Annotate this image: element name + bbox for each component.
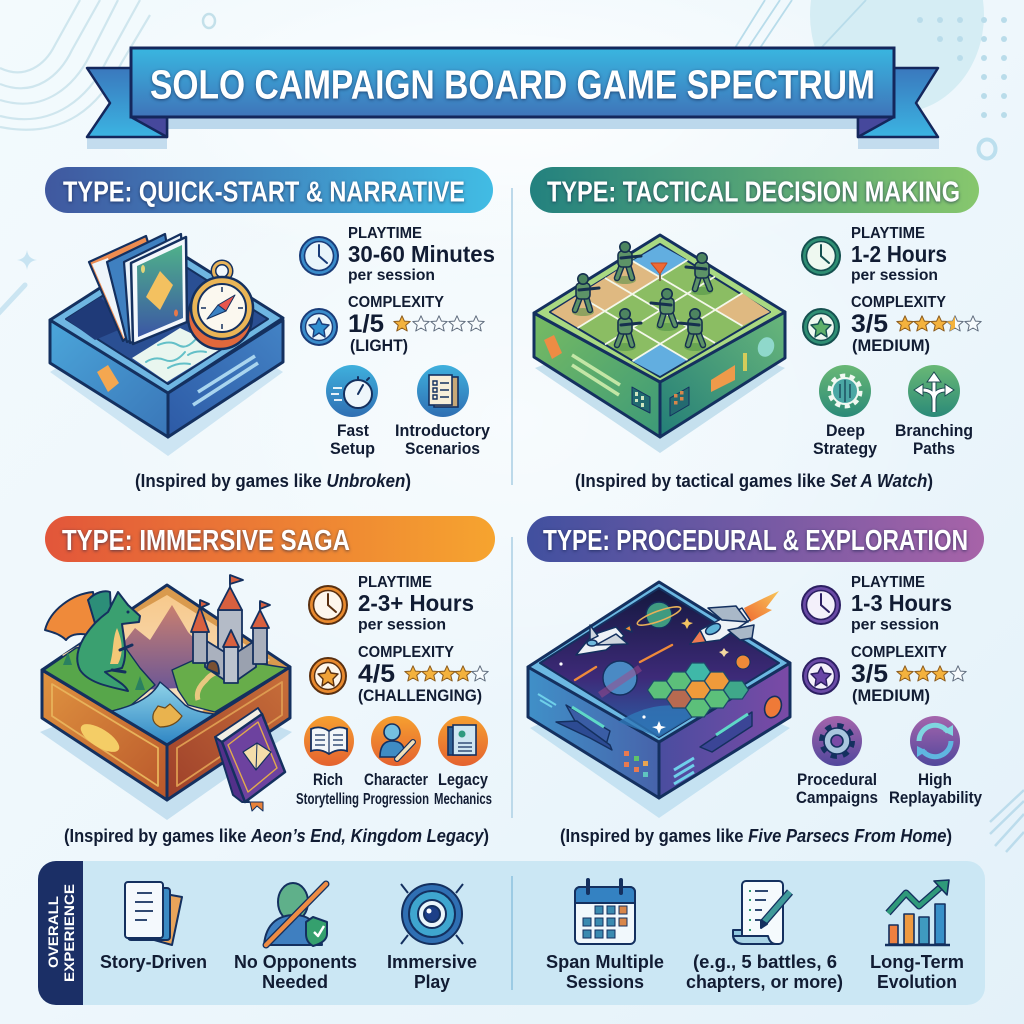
item: no opponents needed: No Opponents [234, 952, 357, 972]
icon: document stack [125, 882, 182, 945]
feature: branching paths [895, 365, 973, 458]
item: immersive play: Play [414, 972, 450, 992]
complexity [803, 644, 966, 705]
feature: character progression [363, 716, 429, 808]
icon: calendar [575, 880, 635, 944]
feature: rich storytelling: Storytelling [296, 791, 359, 808]
heading [530, 167, 979, 213]
complexity: 1/5 [348, 310, 384, 338]
heading [527, 516, 984, 562]
illustration: saga box with dragon, castle and book [40, 575, 292, 820]
icon: clock [309, 586, 347, 624]
playtime: 1-3 Hours [851, 590, 952, 616]
title banner [87, 48, 939, 149]
icon: star badge [803, 309, 839, 345]
complexity: (CHALLENGING) [358, 687, 482, 705]
feature: introductory scenarios: Introductory [395, 421, 491, 440]
heading: TYPE: QUICK-START & NARRATIVE [63, 176, 465, 208]
feature: procedural campaigns: Campaigns [796, 788, 878, 807]
item: immersive play [387, 884, 477, 992]
complexity: COMPLEXITY [358, 644, 454, 661]
icon: star badge [803, 658, 839, 694]
complexity: 3/5 [851, 310, 888, 338]
icon: clock [802, 586, 840, 624]
feature: procedural campaigns [796, 716, 878, 807]
playtime: per session [851, 267, 938, 284]
complexity: (LIGHT) [350, 337, 408, 355]
icon: crossed person and shield [264, 883, 327, 946]
panel: overall experience [38, 861, 985, 1005]
feature: deep strategy [813, 365, 878, 458]
side label [38, 861, 83, 1005]
playtime [802, 225, 947, 284]
item: immersive play: Immersive [387, 952, 477, 972]
playtime: PLAYTIME [358, 574, 432, 591]
item: long-term evolution: Long-Term [870, 952, 964, 972]
playtime: per session [358, 616, 446, 634]
item: no opponents needed [234, 883, 357, 992]
icon: clock [802, 237, 840, 275]
icon: notepad and pencil [733, 881, 790, 944]
playtime: PLAYTIME [851, 574, 925, 591]
panel: immersive saga [40, 516, 495, 846]
side label: OVERALL [46, 896, 61, 968]
feature: character progression: Character [364, 771, 428, 789]
playtime [300, 225, 495, 284]
complexity: COMPLEXITY [348, 294, 444, 311]
item: span multiple sessions [546, 880, 664, 992]
playtime [802, 574, 952, 634]
feature: deep strategy: Deep [826, 421, 865, 440]
rating stars [897, 316, 981, 331]
title: SOLO CAMPAIGN BOARD GAME SPECTRUM [150, 62, 875, 108]
playtime [309, 574, 474, 634]
complexity [301, 294, 484, 355]
item: story-driven: Story-Driven [100, 952, 207, 972]
item: no opponents needed: Needed [262, 972, 328, 992]
item: span multiple sessions: Span Multiple [546, 952, 664, 972]
complexity: (MEDIUM) [852, 687, 930, 705]
side label: EXPERIENCE [62, 884, 77, 982]
illustration: green tactical board box with soldiers [534, 235, 785, 453]
icon: star badge [301, 309, 337, 345]
item: battles and chapters [686, 881, 843, 992]
playtime: per session [348, 267, 435, 284]
feature: branching paths: Paths [913, 439, 955, 458]
playtime: 30-60 Minutes [348, 241, 495, 267]
feature: introductory scenarios: Scenarios [405, 439, 480, 458]
complexity: COMPLEXITY [851, 644, 947, 661]
illustration: castle [191, 575, 270, 683]
icon: growth chart [885, 880, 950, 945]
feature: fast setup: Fast [337, 421, 369, 440]
playtime: PLAYTIME [348, 225, 422, 242]
heading [45, 167, 493, 213]
rating stars [405, 666, 488, 681]
inspired by note: (Inspired by games like Aeon’s End, Kingdom Legacy) [64, 826, 489, 846]
feature: legacy mechanics: Mechanics [434, 791, 492, 808]
item: battles and chapters: chapters, or more) [686, 972, 843, 992]
playtime: PLAYTIME [851, 225, 925, 242]
panel: tactical decision making [530, 167, 981, 491]
illustration: storybook [215, 708, 285, 811]
item: long-term evolution [870, 880, 964, 992]
icon: clock [300, 237, 338, 275]
playtime: 2-3+ Hours [358, 590, 474, 616]
complexity: COMPLEXITY [851, 294, 946, 311]
panel: procedural and exploration [527, 516, 984, 846]
item: battles and chapters: (e.g., 5 battles, 6 [693, 952, 837, 972]
complexity: 3/5 [851, 660, 888, 688]
feature: high replayability: Replayability [889, 788, 982, 807]
panel: quick-start and narrative [45, 167, 495, 491]
divider: quadrants [511, 188, 513, 818]
item: story-driven [100, 882, 207, 972]
feature: fast setup [326, 365, 378, 458]
complexity: (MEDIUM) [852, 337, 930, 355]
icon: star badge [310, 658, 346, 694]
feature: fast setup: Setup [330, 439, 375, 458]
item: long-term evolution: Evolution [877, 972, 957, 992]
feature: character progression: Progression [363, 791, 429, 808]
rating stars [394, 316, 484, 331]
feature: high replayability [889, 716, 982, 807]
feature: deep strategy: Strategy [813, 439, 878, 458]
feature: high replayability: High [918, 770, 952, 789]
inspired by note: (Inspired by tactical games like Set A Watch) [575, 471, 933, 491]
feature: legacy mechanics [434, 716, 492, 808]
inspired by note: (Inspired by games like Five Parsecs From Home) [560, 826, 952, 846]
illustration: dragon [45, 591, 140, 691]
heading: TYPE: IMMERSIVE SAGA [62, 525, 350, 557]
complexity: 4/5 [358, 660, 395, 688]
feature: rich storytelling: Rich [313, 771, 343, 789]
feature: branching paths: Branching [895, 421, 973, 440]
inspired by note: (Inspired by games like Unbroken) [135, 471, 411, 491]
illustration: sci-fi box with ships and hex map [528, 582, 790, 818]
rating stars [897, 666, 966, 681]
icon: eye lens [401, 884, 463, 944]
item: span multiple sessions: Sessions [566, 972, 644, 992]
heading [45, 516, 495, 562]
complexity [310, 644, 488, 705]
illustration: large spaceship [690, 591, 779, 644]
feature: legacy mechanics: Legacy [438, 771, 489, 789]
feature: rich storytelling [296, 716, 359, 808]
feature: introductory scenarios [395, 365, 491, 458]
illustration: small spaceship [576, 625, 632, 655]
playtime: 1-2 Hours [851, 241, 947, 267]
feature: procedural campaigns: Procedural [797, 770, 877, 789]
illustration: blue game box with cards and compass [50, 234, 283, 456]
complexity [803, 294, 981, 355]
playtime: per session [851, 616, 939, 634]
